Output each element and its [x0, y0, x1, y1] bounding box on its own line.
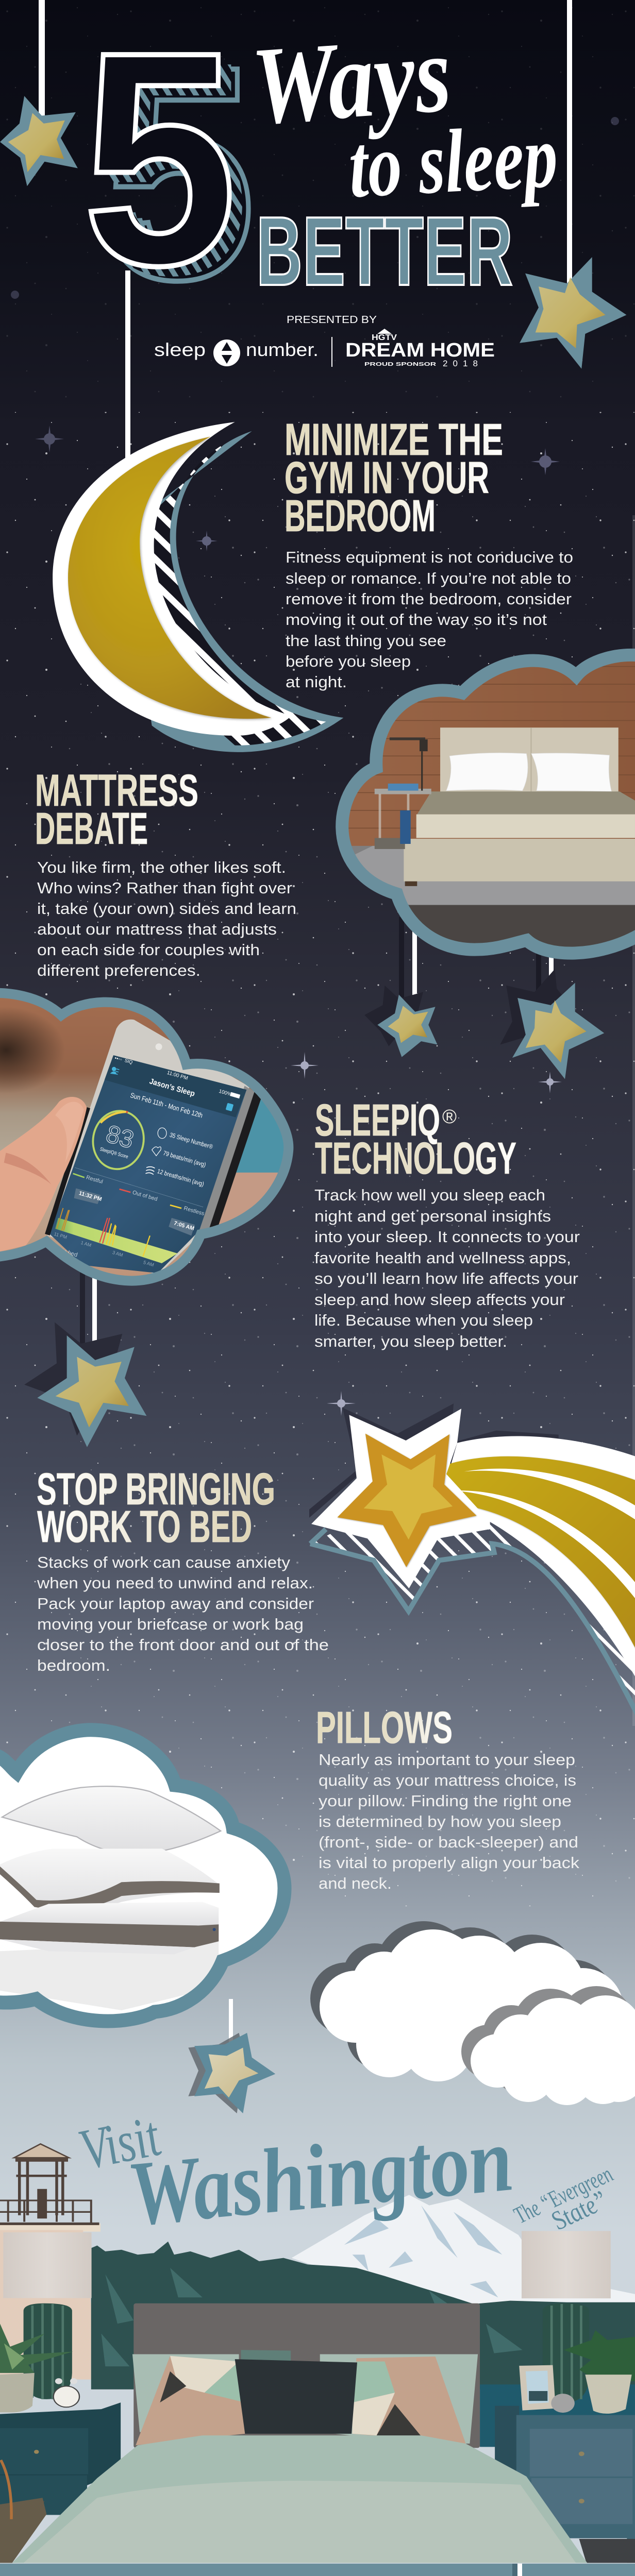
app: sleep timeline: Out of bed: [132, 1190, 158, 1202]
heading: mattress debate: DEBATE: [35, 804, 148, 854]
heading: pillows: PILLOWS: [316, 1703, 453, 1753]
star: top left: [0, 96, 78, 186]
heading: stop bringing work to bed: WORK TO BED: [37, 1502, 252, 1552]
body: stop bringing work to bed: Pack your laptop away and consider: [37, 1595, 314, 1613]
body: pillows: and neck.: [319, 1874, 392, 1892]
heading: stop bringing work to bed: STOP BRINGING: [37, 1464, 275, 1514]
body: minimize the gym: remove it from the bedroom, consider: [286, 590, 572, 608]
body: pillows: (front-, side- or back-sleeper) and: [319, 1833, 578, 1851]
heading: minimize the gym: BEDROOM: [285, 491, 436, 541]
title script: Ways: Ways: [248, 11, 455, 148]
app: sleep timeline: 7:05 AM: [173, 1220, 195, 1232]
section: sleepiq technology: [314, 1095, 580, 1350]
app: sleep timeline: Restless: [183, 1205, 205, 1217]
heading: sleepiq technology: [315, 1095, 516, 1183]
app: labels and readings: Sun Feb 11th - Mon Feb 12th: [129, 1091, 204, 1120]
mural lettering: Visit: Visit: [72, 2104, 169, 2182]
heading: sleepiq technology: ®: [442, 1106, 457, 1128]
cloud: front white: [471, 1995, 635, 2105]
HGTV dream home logo: PROUD SPONSOR: [364, 362, 437, 367]
body: sleepiq technology: Track how well you sleep each: [314, 1186, 545, 1204]
app: labels and readings: 83: [103, 1120, 137, 1154]
hanging string: pillow cloud to star: [229, 1999, 233, 2045]
hanging string: right: [567, 0, 572, 284]
body: minimize the gym: sleep or romance. If you’re not able to: [286, 569, 571, 587]
heading: sleepiq technology: TECHNOLOGY: [315, 1133, 516, 1183]
heading: stop bringing work to bed: [37, 1464, 275, 1552]
star: under bed right: [500, 969, 604, 1079]
knit blanket: [24, 2481, 576, 2563]
cloud: pillows photo: [0, 1723, 292, 2028]
body: minimize the gym: moving it out of the way so it’s not: [286, 611, 547, 629]
hand holding phone: [0, 1097, 88, 1253]
app: labels and readings: ●●○○: [114, 1056, 123, 1062]
body: mattress debate: You like firm, the other likes soft.: [37, 858, 286, 876]
left plant and pot: [0, 2324, 73, 2413]
moon striped crescent: [133, 444, 326, 745]
app: sleep timeline: 3 AM: [112, 1250, 124, 1258]
phone screen: [49, 1055, 246, 1273]
hanging strings and stars below bed cloud: [364, 917, 604, 1079]
star: under bed left: [364, 986, 438, 1057]
big numeral 5: 5: [95, 0, 250, 338]
hanging string: centre to moon: [125, 270, 130, 466]
title script: to sleep: to sleep: [346, 106, 560, 216]
star white layer: [311, 1409, 490, 1588]
body: stop bringing work to bed: [37, 1553, 329, 1674]
app: labels and readings: 11:00 PM: [166, 1070, 189, 1081]
section: pillows: [316, 1703, 580, 1892]
forest: [91, 2242, 635, 2389]
app: sleep timeline: [54, 1167, 205, 1267]
heading: minimize the gym: GYM IN YOUR: [285, 453, 489, 503]
app: labels and readings: 12 breaths/min (avg): [156, 1167, 205, 1188]
silver apple: [551, 2394, 575, 2413]
mural lettering: the evergreen state: State”: [545, 2185, 615, 2235]
body: pillows: is vital to properly align your back: [319, 1854, 580, 1872]
right nightstand: [495, 2406, 635, 2563]
app: labels and readings: 35 Sleep Number®: [169, 1131, 214, 1150]
bedroom scene: [0, 2104, 635, 2563]
cloud: bed photo: [316, 645, 635, 968]
body: pillows: your pillow. Finding the right one: [319, 1792, 572, 1810]
right lamp: [522, 2231, 611, 2402]
shooting star stripes: [310, 1520, 635, 1715]
picture frame: [519, 2365, 556, 2411]
photo: bedroom with wood wall: [348, 662, 635, 947]
sleep number logo: number.: [246, 339, 319, 360]
hanging string and star under phone cloud: [24, 1273, 146, 1447]
shooting star teal outline: [310, 1529, 635, 1715]
cloud border: phone: [0, 993, 289, 1281]
phone body: [47, 1020, 249, 1275]
body: sleepiq technology: life. Because when you sleep: [314, 1311, 533, 1329]
section: minimize the gym: [285, 415, 573, 691]
duvet: [12, 2435, 587, 2563]
big numeral 5: 5: [102, 4, 256, 343]
app: sleep timeline: 5 AM: [143, 1260, 155, 1267]
body: pillows: quality as your mattress choice, is: [319, 1771, 576, 1789]
app: labels and readings: SleepIQ® Score: [99, 1146, 129, 1160]
white clouds: [310, 1921, 635, 2105]
lake: [480, 2384, 635, 2447]
body: pillows: is determined by how you sleep: [319, 1812, 561, 1831]
body: mattress debate: Who wins? Rather than fight over: [37, 879, 292, 897]
moon white crescent: [53, 422, 292, 736]
body: pillows: [319, 1751, 580, 1892]
moon: [53, 422, 343, 752]
star outer gold: [337, 1434, 476, 1567]
body: minimize the gym: [286, 548, 573, 691]
body: minimize the gym: the last thing you see: [286, 632, 446, 650]
floor corners: [579, 2539, 635, 2563]
cloud: rear white: [320, 1929, 635, 2081]
body: mattress debate: it, take (your own) sides and learn: [37, 900, 296, 918]
section: mattress debate: [35, 766, 296, 979]
sparkle stars: [11, 117, 619, 1416]
photo background blur: [0, 998, 254, 1276]
body: sleepiq technology: sleep and how sleep affects your: [314, 1291, 565, 1309]
body: stop bringing work to bed: moving your briefcase or work bag: [37, 1615, 304, 1633]
tail gold band: [444, 1456, 635, 1661]
body: stop bringing work to bed: bedroom.: [37, 1656, 110, 1674]
body: sleepiq technology: smarter, you sleep better.: [314, 1332, 507, 1350]
heading: sleepiq technology: SLEEPIQ: [315, 1095, 440, 1145]
left lamp: [3, 2232, 92, 2399]
mountain: [292, 2195, 635, 2311]
HGTV dream home logo: HGTV: [372, 333, 397, 342]
presented by label: PRESENTED BY: [287, 314, 377, 326]
app: score ring: [92, 1110, 145, 1171]
body: sleepiq technology: [314, 1186, 580, 1350]
starfield speckles: [0, 0, 635, 1906]
hanging string: footer star: [512, 2564, 522, 2576]
app: labels and readings: [99, 1056, 240, 1188]
moon back crescent teal: [122, 431, 343, 752]
bag: [0, 2460, 46, 2563]
HGTV dream home logo: DREAM HOME: [345, 340, 495, 361]
HGTV dream home logo: 2018: [443, 359, 478, 368]
body: stop bringing work to bed: closer to the front door and out of the: [37, 1636, 329, 1654]
footer panel: [0, 2564, 635, 2576]
body: mattress debate: [37, 858, 296, 979]
body: sleepiq technology: night and get personal insights: [314, 1207, 551, 1225]
sleep number logo: sleep: [154, 339, 206, 360]
footer background: [0, 2564, 635, 2576]
heading: minimize the gym: MINIMIZE THE: [285, 415, 503, 465]
body: sleepiq technology: favorite health and wellness apps,: [314, 1249, 571, 1267]
shooting star shadow: [309, 1403, 559, 1518]
moon gold crescent: [68, 436, 271, 719]
shooting star: [309, 1403, 635, 1715]
section: stop bringing work to bed: [37, 1464, 329, 1674]
tail streaks: [453, 1469, 635, 1607]
mural lettering: the evergreen state: [508, 2161, 618, 2235]
cloud: phone app photo: [0, 989, 300, 1285]
heading: mattress debate: MATTRESS: [35, 766, 198, 816]
body: pillows: Nearly as important to your sleep: [319, 1751, 575, 1769]
body: mattress debate: on each side for couples with: [37, 941, 260, 959]
app: sleep timeline: 11:32 PM: [78, 1190, 103, 1202]
app: sleep timeline: Restful: [86, 1175, 104, 1185]
green pillows: [132, 2350, 478, 2444]
cloud border: bed: [342, 655, 635, 953]
star: under phone: [24, 1323, 146, 1447]
app: labels and readings: SIQ: [124, 1058, 133, 1065]
left nightstand: [0, 2402, 121, 2521]
body: minimize the gym: Fitness equipment is not conducive to: [286, 548, 573, 566]
body: stop bringing work to bed: when you need to unwind and relax.: [37, 1574, 313, 1592]
headboard: [133, 2303, 480, 2448]
body: sleepiq technology: into your sleep. It connects to your: [314, 1228, 580, 1246]
dark centre pillow: [235, 2359, 357, 2434]
star: under pillows: [188, 2033, 275, 2113]
app: person and list icons: [110, 1067, 233, 1111]
app: labels and readings: Jason’s Sleep: [148, 1077, 196, 1098]
body: mattress debate: different preferences.: [37, 961, 200, 979]
heading: mattress debate: [35, 766, 198, 854]
app: sleep timeline: 11 PM: [54, 1231, 68, 1240]
star: top right: [520, 257, 626, 369]
tail white band: [442, 1436, 635, 1688]
big numeral 5: 5: [89, 0, 243, 333]
app: labels and readings: 100%: [218, 1089, 232, 1097]
sleep number logo: [154, 339, 319, 366]
cloud: rear shadow: [310, 1921, 635, 2073]
patterned pillow left: [136, 2356, 245, 2445]
body: minimize the gym: at night.: [286, 673, 347, 691]
star inner gold: [364, 1454, 453, 1539]
patterned pillow right: [353, 2357, 466, 2444]
app: labels and readings: 79 beats/min (avg): [162, 1149, 207, 1168]
cloud: front shadow: [461, 1986, 635, 2096]
app: sleep timeline: 1 AM: [80, 1240, 92, 1248]
title block: [39, 0, 572, 466]
hanging string: left: [39, 0, 45, 120]
cloud border: pillows: [0, 1730, 285, 2021]
heading: minimize the gym: [285, 415, 503, 541]
body: stop bringing work to bed: Stacks of work can cause anxiety: [37, 1553, 291, 1571]
presented by logos: [154, 314, 495, 368]
HGTV dream home logo: [345, 329, 495, 368]
photo: pillow stack: [0, 1737, 277, 2014]
body: sleepiq technology: so you’ll learn how life affects your: [314, 1269, 578, 1287]
right plant and pot: [564, 2330, 635, 2414]
body: mattress debate: about our mattress that adjusts: [37, 920, 277, 938]
lighthouse tower: [0, 2144, 101, 2380]
body: minimize the gym: before you sleep: [286, 652, 411, 670]
app: sleep timeline: In bed: [61, 1248, 78, 1259]
alarm clock: [54, 2378, 79, 2407]
